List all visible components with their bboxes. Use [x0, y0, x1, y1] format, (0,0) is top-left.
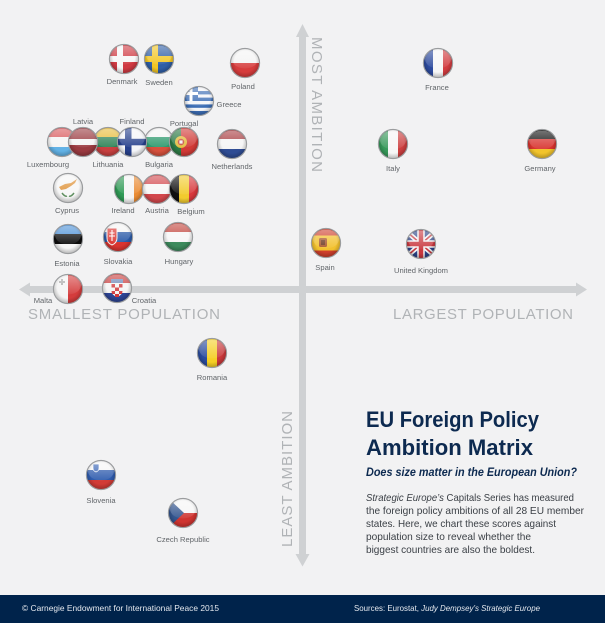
- flag: Greece: [184, 86, 241, 116]
- flag: Netherlands: [212, 129, 253, 171]
- copyright: © Carnegie Endowment for International Peace 2015: [22, 603, 219, 613]
- flag: Czech Republic: [156, 498, 210, 544]
- flag: Belgium: [169, 174, 205, 216]
- flag: Denmark: Denmark: [107, 77, 138, 86]
- flag: Luxembourg: Luxembourg: [27, 160, 69, 169]
- flag: Denmark: [107, 44, 139, 86]
- flag: Estonia: Estonia: [54, 259, 80, 268]
- flag: Austria: Austria: [145, 206, 170, 215]
- body text: the foreign policy ambitions of all 28 EU member: [366, 506, 585, 517]
- flag: Belgium: Belgium: [177, 207, 205, 216]
- title: EU Foreign Policy: [366, 407, 540, 432]
- horizontal axis arrow: [19, 282, 587, 296]
- flag: Italy: [378, 129, 408, 173]
- flag: Estonia: [53, 224, 83, 268]
- flag: Malta: Malta: [34, 296, 53, 305]
- vertical axis arrow: [296, 24, 310, 566]
- body text: biggest countries are also the boldest.: [366, 545, 535, 556]
- flag: Sweden: [144, 44, 174, 87]
- flag: Slovakia: [103, 222, 133, 266]
- footer bar: [0, 595, 605, 623]
- subtitle: Does size matter in the European Union?: [366, 465, 577, 479]
- flag: Austria: [142, 174, 172, 215]
- body text: Strategic Europe’s Capitals Series has measured: [366, 493, 574, 504]
- flag: Hungary: Hungary: [165, 257, 194, 266]
- flag: Spain: [311, 228, 341, 272]
- sources: Sources: Eurostat, Judy Dempsey’s Strategic Europe: [354, 603, 540, 613]
- flag: Slovakia: Slovakia: [104, 257, 133, 266]
- flag: Luxembourg: [28, 126, 72, 168]
- flag: Croatia: Croatia: [132, 296, 157, 305]
- flag: Slovenia: Slovenia: [86, 496, 116, 505]
- flag: United Kingdom: United Kingdom: [394, 266, 448, 275]
- flag: Greece: Greece: [217, 100, 241, 109]
- flag: France: France: [425, 83, 449, 92]
- body text: [366, 493, 585, 556]
- flag: Malta: [34, 274, 83, 305]
- flag: United Kingdom: [394, 229, 448, 275]
- flag: Spain: Spain: [315, 263, 335, 272]
- flag: France: [423, 48, 453, 92]
- flag: Poland: [230, 48, 260, 91]
- flag: Netherlands: Netherlands: [212, 162, 253, 171]
- flag: Germany: Germany: [524, 164, 556, 173]
- axis label: least ambition: LEAST AMBITION: [279, 411, 296, 547]
- flag: Bulgaria: [144, 127, 174, 169]
- body text: population size to reveal whether the: [366, 532, 531, 543]
- flag: Romania: [197, 338, 228, 382]
- body text: states. Here, we chart these scores against: [366, 519, 556, 530]
- title: [366, 407, 540, 460]
- flag: Slovenia: [86, 460, 116, 505]
- axis label: most ambition: MOST AMBITION: [308, 37, 325, 172]
- flag: Finland: [117, 117, 147, 157]
- flag: Cyprus: [53, 173, 83, 215]
- flag: Germany: [524, 129, 557, 173]
- flag: Sweden: Sweden: [145, 78, 173, 87]
- flag: Latvia: [68, 117, 98, 157]
- flag: Lithuania: Lithuania: [93, 160, 124, 169]
- flag: Hungary: [163, 222, 194, 266]
- flag: Finland: Finland: [120, 117, 144, 126]
- flag: Czech Republic: Czech Republic: [156, 535, 210, 544]
- title: Ambition Matrix: [366, 435, 534, 460]
- flag: Ireland: [111, 174, 144, 215]
- flag: Italy: Italy: [386, 164, 400, 173]
- flag: Bulgaria: Bulgaria: [145, 160, 174, 169]
- flag: Portugal: Portugal: [170, 119, 198, 128]
- flag: Poland: Poland: [231, 82, 255, 91]
- axis label: smallest population: SMALLEST POPULATION: [28, 306, 220, 323]
- flag: Cyprus: Cyprus: [55, 206, 79, 215]
- flag: Ireland: Ireland: [111, 206, 135, 215]
- axis label: largest population: LARGEST POPULATION: [393, 306, 573, 323]
- flag: Lithuania: [93, 127, 124, 169]
- flag: Croatia: [102, 273, 157, 305]
- flag: Latvia: Latvia: [73, 117, 94, 126]
- flag: Portugal: [169, 119, 199, 157]
- flag: Romania: Romania: [197, 373, 228, 382]
